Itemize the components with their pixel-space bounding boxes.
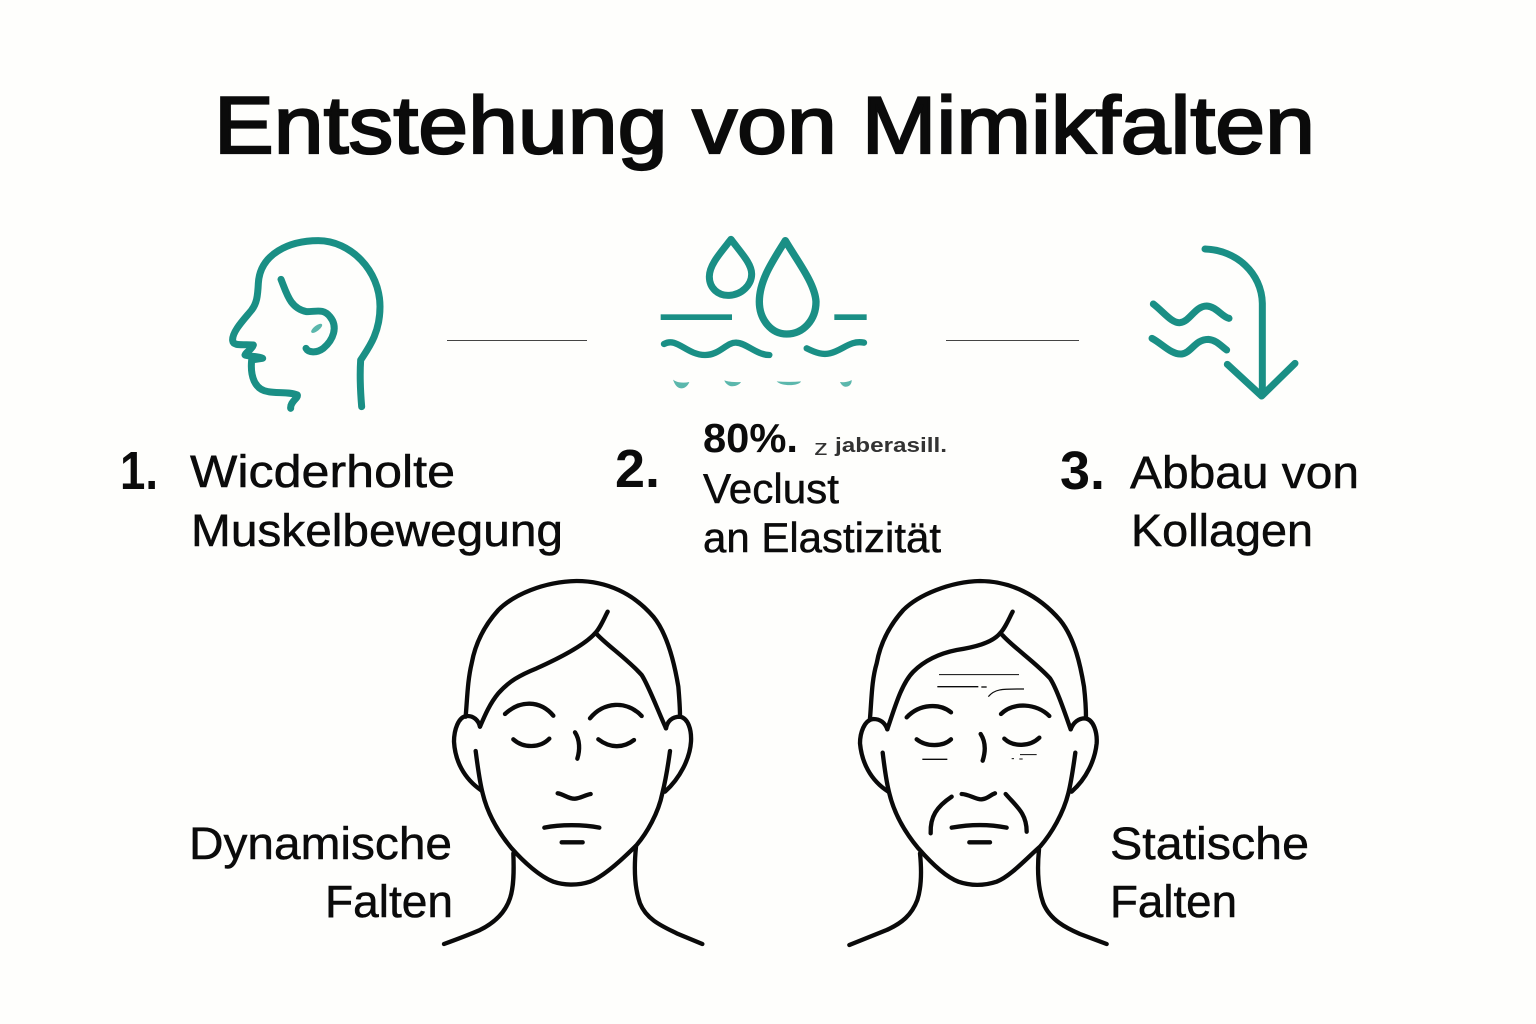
step 1 text: Wicderholte [190,446,455,497]
step number 3: 3. [1060,441,1105,501]
step 3 text [1130,447,1359,556]
face: smooth with dynamic wrinkles [444,581,702,944]
step 2 text: an Elastizität [703,514,941,561]
title: Entstehung von Mimikfalten [214,81,1315,171]
step 3: collagen breakdown [1060,441,1359,556]
divider: step 2 to 3 [946,340,1079,342]
step 2 text: Veclust [703,465,839,512]
icon: water drops and skin [661,239,867,388]
step 2 percentage: 80%. [703,415,798,461]
step 3 text: Kollagen [1131,505,1313,556]
step 1 text [190,446,563,556]
label: static wrinkles: Falten [1110,876,1237,927]
step 2 small caption: jaberasill. [834,435,947,457]
step 2 small caption: z [814,435,828,460]
face: aged with static wrinkles [849,581,1107,945]
label: static wrinkles [1110,818,1309,927]
step 2 text [703,465,941,561]
step number 1: 1. [120,441,158,501]
label: dynamic wrinkles: Dynamische [189,818,452,869]
icon: head profile [233,241,380,408]
step 2: loss of elasticity [615,415,947,561]
step 3 text: Abbau von [1130,447,1359,498]
step 1: repeated muscle movement [120,441,563,556]
label: dynamic wrinkles [189,818,453,927]
step 1 text: Muskelbewegung [191,505,563,556]
step number 2: 2. [615,439,660,499]
label: dynamic wrinkles: Falten [325,876,453,927]
label: static wrinkles: Statische [1110,818,1309,869]
icon: collagen decline arrow [1152,249,1295,396]
step 2 small caption [814,435,947,460]
divider: step 1 to 2 [447,340,587,342]
